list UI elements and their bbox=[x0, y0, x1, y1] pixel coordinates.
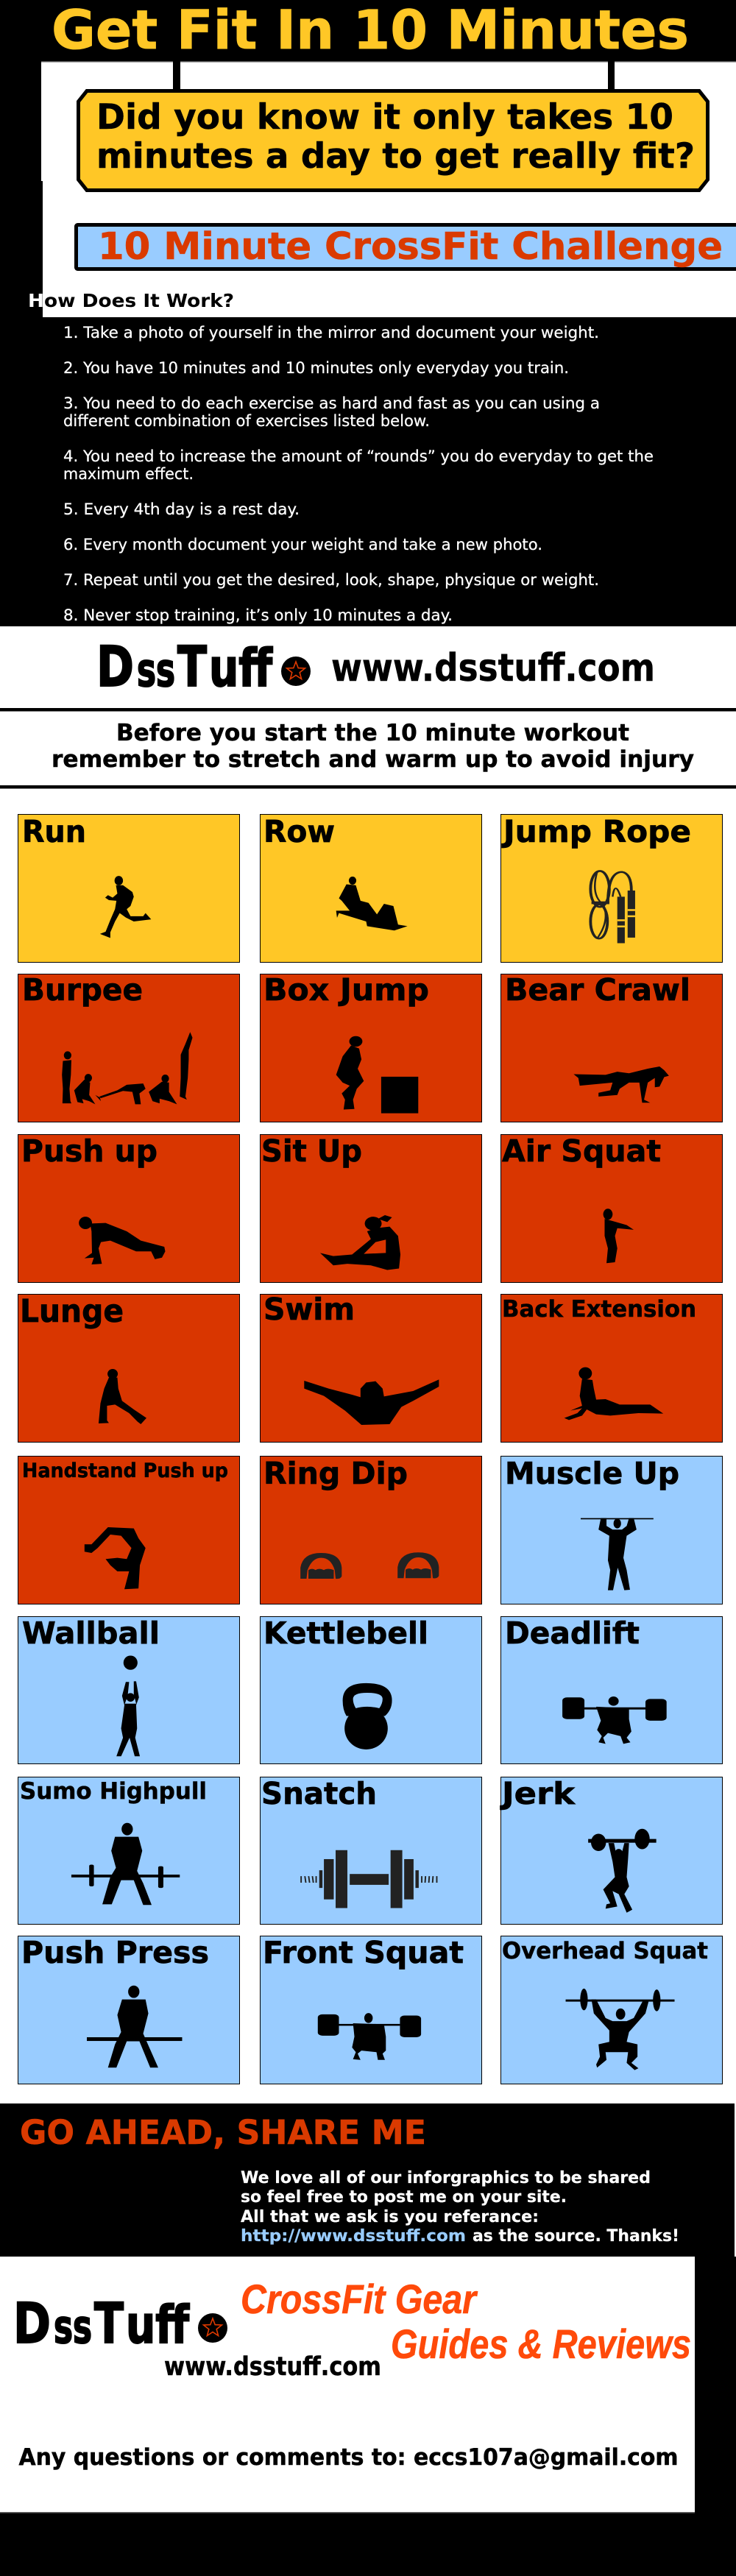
panel: steps list bbox=[0, 317, 736, 626]
card: front squat bbox=[261, 1935, 481, 2084]
card: kettlebell bbox=[261, 1616, 481, 1763]
card: sit up bbox=[261, 1133, 481, 1282]
panel: steps list: 4. You need to increase the amount of “rounds” you do everyday to get the bbox=[63, 447, 654, 465]
card: back extension bbox=[500, 1294, 723, 1443]
heading: go ahead share me: GO AHEAD, SHARE ME bbox=[20, 2113, 426, 2152]
warm up note: remember to stretch and warm up to avoid injury bbox=[52, 746, 694, 773]
panel: steps list: 7. Repeat until you get the desired, look, shape, physique or weight. bbox=[63, 571, 599, 589]
card: push up bbox=[18, 1133, 240, 1282]
panel: steps list: maximum effect. bbox=[63, 465, 194, 483]
panel: footer card bbox=[0, 2257, 695, 2513]
share message: All that we ask is you referance: bbox=[241, 2208, 539, 2226]
card: sumo highpull: Sumo Highpull bbox=[20, 1778, 207, 1805]
header band bbox=[0, 0, 736, 317]
card: row: Row bbox=[263, 814, 335, 849]
icon: jump rope bbox=[590, 871, 635, 944]
logo: dsstuff top: D bbox=[96, 634, 134, 699]
card: bear crawl bbox=[500, 972, 723, 1122]
icon: air squat figure bbox=[604, 1209, 634, 1263]
logo: dsstuff top bbox=[96, 634, 311, 699]
card: muscle up: Muscle Up bbox=[505, 1456, 679, 1491]
card: run: Run bbox=[22, 814, 86, 849]
card: jump rope bbox=[500, 814, 723, 963]
card: sit up: Sit Up bbox=[261, 1133, 362, 1169]
card: swim bbox=[261, 1292, 481, 1443]
logo: dsstuff top: uff bbox=[209, 638, 273, 698]
contact line: Any questions or comments to: eccs107a@gmail.com bbox=[19, 2444, 679, 2471]
panel: steps list: different combination of exercises listed below. bbox=[63, 412, 430, 430]
card: back extension: Back Extension bbox=[502, 1296, 696, 1323]
logo: dsstuff top: T bbox=[177, 634, 207, 699]
card: burpee: Burpee bbox=[22, 972, 143, 1008]
card: overhead squat bbox=[500, 1936, 723, 2084]
icon: swimmer bbox=[304, 1379, 439, 1425]
card: row bbox=[261, 814, 481, 963]
card: wallball: Wallball bbox=[22, 1616, 160, 1651]
card: run bbox=[18, 814, 240, 963]
warm up note: Before you start the 10 minute workout bbox=[116, 720, 629, 746]
icon: push up figure bbox=[79, 1217, 166, 1264]
card: overhead squat: Overhead Squat bbox=[502, 1938, 708, 1964]
panel: steps list: 1. Take a photo of yourself in the mirror and document your weight. bbox=[63, 324, 599, 342]
icon: rower bbox=[336, 877, 408, 930]
card: box jump bbox=[261, 972, 481, 1122]
logo: dsstuff bottom bbox=[13, 2290, 227, 2356]
icon: back extension figure bbox=[565, 1367, 663, 1420]
callout: did you know bbox=[78, 91, 708, 190]
card: jump rope: Jump Rope bbox=[501, 814, 691, 849]
share message bbox=[241, 2169, 679, 2246]
tagline: crossfit gear: CrossFit Gear bbox=[241, 2276, 478, 2322]
icon: gymnastic rings bbox=[300, 1552, 439, 1579]
card: wallball bbox=[18, 1616, 240, 1763]
icon: front squat figure bbox=[318, 2013, 421, 2060]
icon: dumbbell bbox=[300, 1850, 437, 1908]
card: handstand push up bbox=[18, 1456, 240, 1604]
card: snatch: Snatch bbox=[261, 1776, 377, 1811]
icon: lunge figure bbox=[99, 1369, 146, 1424]
website url: www.dsstuff.com bbox=[331, 646, 655, 690]
icon: sit up figure bbox=[320, 1215, 400, 1270]
card: air squat bbox=[500, 1133, 723, 1282]
card: push up: Push up bbox=[21, 1133, 158, 1169]
card: muscle up bbox=[500, 1456, 723, 1604]
card: box jump: Box Jump bbox=[263, 972, 429, 1008]
callout: did you know: Did you know it only takes 10 bbox=[96, 97, 673, 138]
card: air squat: Air Squat bbox=[502, 1133, 661, 1169]
callout connectors bbox=[173, 61, 615, 91]
share message: We love all of our inforgraphics to be shared bbox=[241, 2169, 651, 2187]
card: sumo highpull bbox=[18, 1777, 240, 1924]
share message: so feel free to post me on your site. bbox=[241, 2188, 567, 2207]
icon: kettlebell bbox=[343, 1683, 392, 1749]
panel: steps list: 8. Never stop training, it’s only 10 minutes a day. bbox=[63, 606, 453, 624]
card: deadlift: Deadlift bbox=[505, 1616, 640, 1651]
logo: dsstuff top: ss bbox=[137, 643, 175, 697]
share message: http://www.dsstuff.com bbox=[241, 2227, 466, 2246]
callout: did you know: minutes a day to get really fit? bbox=[96, 136, 695, 177]
card: lunge: Lunge bbox=[20, 1293, 124, 1330]
panel: steps list: 6. Every month document your weight and take a new photo. bbox=[63, 536, 542, 553]
icon: box jumper bbox=[336, 1036, 418, 1114]
icon: bear crawl figure bbox=[573, 1066, 669, 1103]
panel: share section background bbox=[0, 2103, 736, 2576]
heading: how does it work: How Does It Work? bbox=[28, 290, 234, 311]
logo: dsstuff bottom: uff bbox=[126, 2295, 190, 2355]
card: jerk bbox=[500, 1776, 723, 1924]
card: lunge bbox=[18, 1293, 240, 1443]
panel: steps list: 3. You need to do each exercise as hard and fast as you can using a bbox=[63, 394, 600, 412]
logo: dsstuff bottom: D bbox=[13, 2290, 51, 2356]
icon: muscle up figure bbox=[581, 1518, 654, 1590]
icon: deadlift figure bbox=[562, 1696, 667, 1744]
card: swim: Swim bbox=[263, 1292, 355, 1327]
card: snatch bbox=[261, 1776, 481, 1924]
icon: sumo highpull figure bbox=[71, 1823, 180, 1905]
icon: overhead squat figure bbox=[566, 1989, 675, 2070]
icon: jerk figure bbox=[588, 1829, 657, 1913]
card: ring dip bbox=[261, 1456, 481, 1604]
card: burpee bbox=[18, 972, 240, 1122]
footer website url: www.dsstuff.com bbox=[164, 2352, 381, 2382]
panel: steps list: 2. You have 10 minutes and 10 minutes only everyday you train. bbox=[63, 359, 569, 377]
icon: handstand figure bbox=[85, 1527, 146, 1589]
panel: steps list: 5. Every 4th day is a rest day. bbox=[63, 500, 300, 518]
warm up note bbox=[52, 720, 694, 773]
icon: push press figure bbox=[87, 1986, 182, 2067]
title: Get Fit In 10 Minutes bbox=[52, 0, 689, 62]
card: push press: Push Press bbox=[21, 1935, 209, 1970]
card: handstand push up: Handstand Push up bbox=[22, 1459, 228, 1482]
card: deadlift bbox=[500, 1616, 723, 1763]
logo: dsstuff bottom: ss bbox=[54, 2300, 92, 2354]
card: bear crawl: Bear Crawl bbox=[505, 972, 690, 1008]
icon: wallball figure bbox=[116, 1655, 140, 1756]
logo: dsstuff bottom: T bbox=[94, 2290, 124, 2356]
icon: burpee sequence bbox=[62, 1032, 192, 1104]
icon: runner bbox=[100, 876, 151, 938]
card: kettlebell: Kettlebell bbox=[263, 1616, 428, 1651]
card: front squat: Front Squat bbox=[263, 1935, 464, 1970]
card: push press bbox=[18, 1935, 240, 2084]
share message: as the source. Thanks! bbox=[473, 2227, 679, 2246]
card: jerk: Jerk bbox=[500, 1776, 576, 1811]
banner: 10 minute crossfit challenge: 10 Minute CrossFit Challenge bbox=[98, 225, 723, 269]
card: ring dip: Ring Dip bbox=[263, 1456, 408, 1491]
